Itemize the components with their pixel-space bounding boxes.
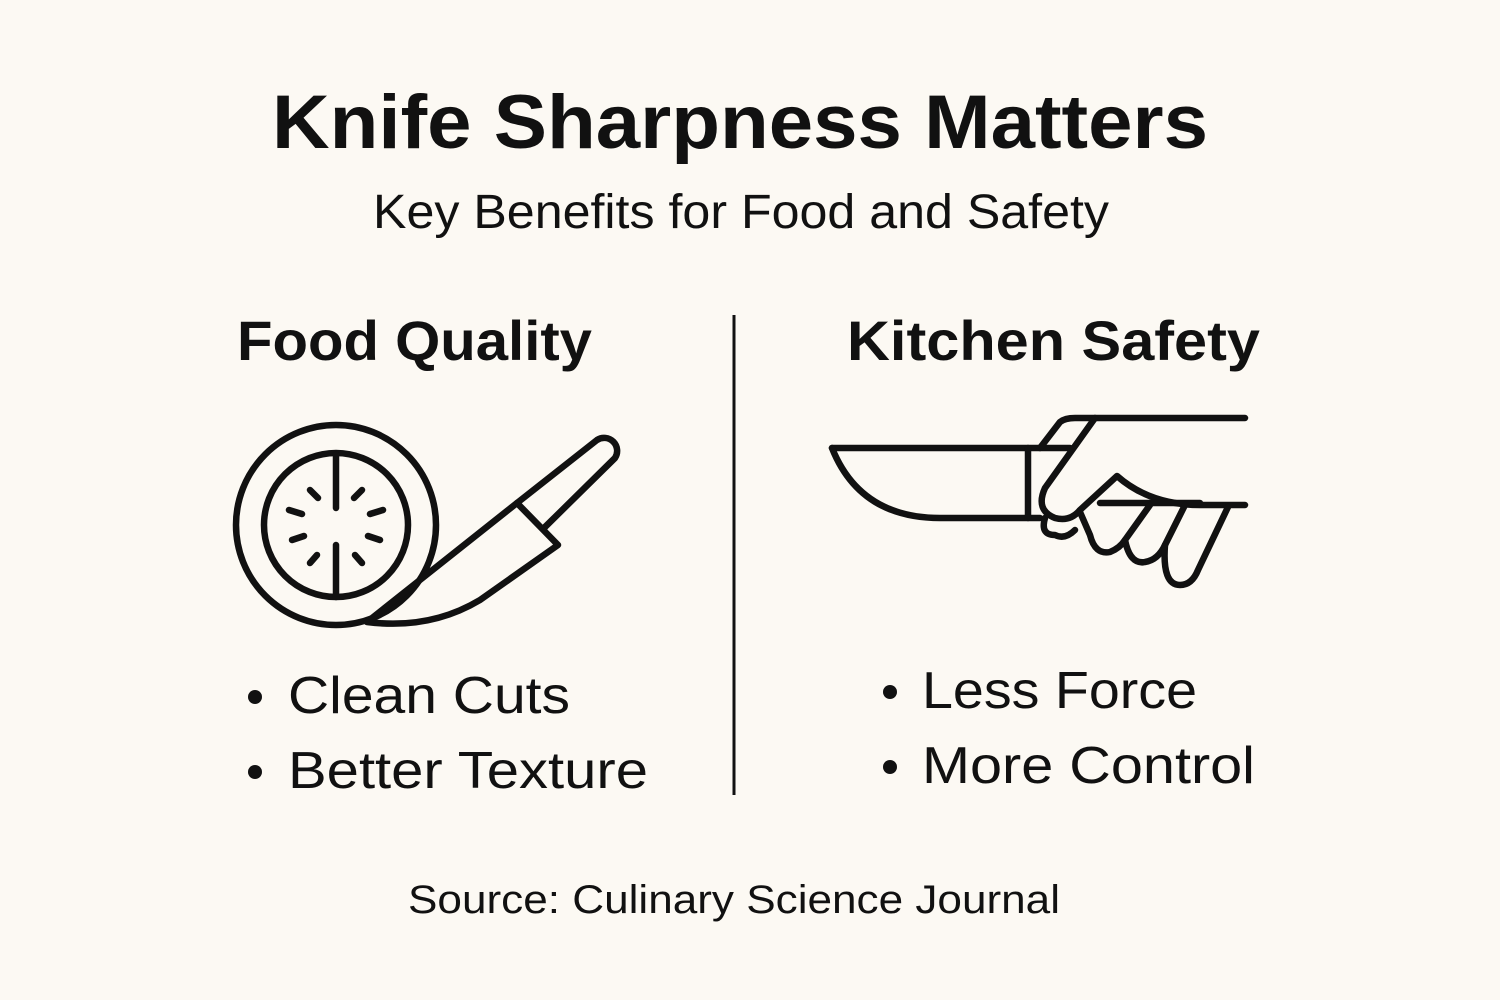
panel: kitchen safety (832, 309, 1260, 795)
panel: food quality (236, 309, 648, 800)
bullets: kitchen safety: Less Force (922, 662, 1197, 720)
heading: food quality: Food Quality (237, 309, 592, 372)
icon: tomato and knife (236, 425, 617, 625)
bullets: kitchen safety: More Control (922, 737, 1255, 795)
title: Knife Sharpness Matters (272, 80, 1208, 165)
bullets: food quality: Better Texture (288, 742, 648, 800)
divider (732, 315, 736, 795)
source: Source: Culinary Science Journal (408, 878, 1060, 922)
heading: kitchen safety: Kitchen Safety (847, 309, 1260, 372)
subtitle: Key Benefits for Food and Safety (373, 186, 1109, 239)
bullets: food quality (248, 667, 648, 800)
bullets: food quality: Clean Cuts (288, 667, 570, 725)
icon: hand holding knife (832, 418, 1245, 585)
bullets: kitchen safety (883, 662, 1255, 795)
